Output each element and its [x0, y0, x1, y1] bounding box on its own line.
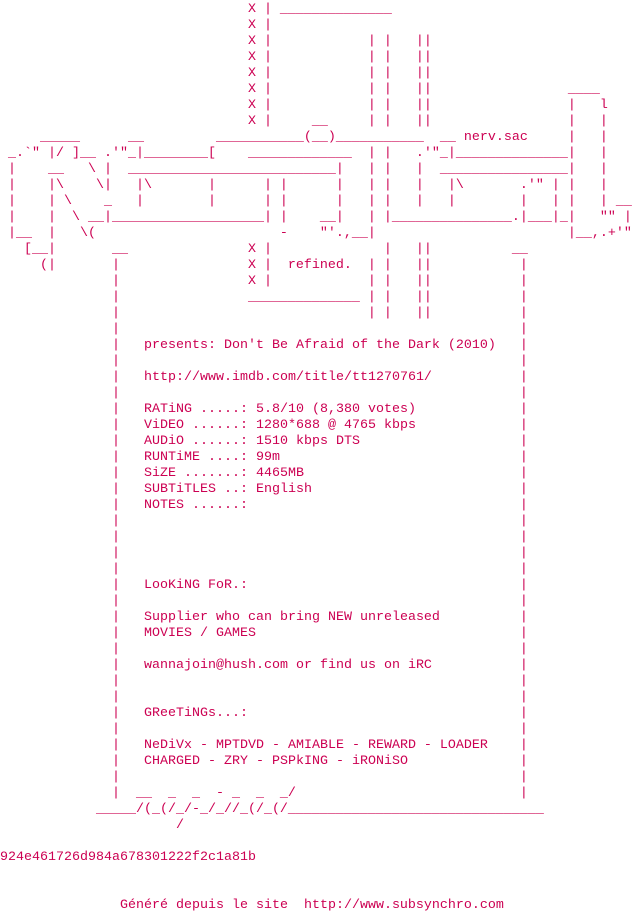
release specs: RATiNG .....: 5.8/10 (8,380 votes) ViDEO ......: 1280*688 @ 4765 kbps AUDiO ......: 1510 kbps DTS RUNTiME ....: 99m SiZE .......: 4465MB SUBTiTLES ..: English NOTES ......: [144, 402, 416, 513]
source credit: Généré depuis le site http://www.subsynchro.com [120, 898, 504, 913]
imdb link: http://www.imdb.com/title/tt1270761/ [144, 370, 432, 385]
info panel frame: | | | | | | | | | | | | | | | | | | | | | | | | | | | | | | | | | | | | | | | | | | | | | | | | | | | | | | | | | | [0, 322, 528, 785]
greetings list: NeDiVx - MPTDVD - AMIABLE - REWARD - LOADER CHARGED - ZRY - PSPkING - iRONiSO [144, 738, 488, 769]
contact line: wannajoin@hush.com or find us on iRC [144, 658, 432, 673]
heading: release title: presents: Don't Be Afraid of the Dark (2010) [144, 338, 496, 353]
file hash: 924e461726d984a678301222f2c1a81b [0, 850, 256, 865]
ascii logo: nerv.sac refined: X | ______________ X | X | | | || X | | | || X | | | || X | | | || ____ X | | | || | l X | __ | | || | | _____ __ ___________(__)___________ __ nerv.sac | | _.`" |/ ]__ .'"_|________[ _____________ | | .'"_|______________| | | __ \ | __________________________| | | | ________________| | | |\ \| |\ | | | | | | | |\ .'" | | | | | \ _ | | | | | | | | | | | | | __ | | \ __|___________________| | __| | |_______________.|___|_| "" | |__ | \( - "'.,__| |__,.+'" [__| __ X | | || __ (| | X | refined. | | || | | X | | | || | | ______________ | | || | | | | || | [0, 2, 632, 321]
ascii signature footer of panel: | __ _ _ - _ _ _/ | _____/(_(/_/-_/_//_(/_(/________________________________ / [0, 786, 544, 833]
looking for heading: LooKiNG FoR.: [144, 578, 248, 593]
supplier request: Supplier who can bring NEW unreleased MOVIES / GAMES [144, 610, 440, 641]
greetings heading: GReeTiNGs...: [144, 706, 248, 721]
